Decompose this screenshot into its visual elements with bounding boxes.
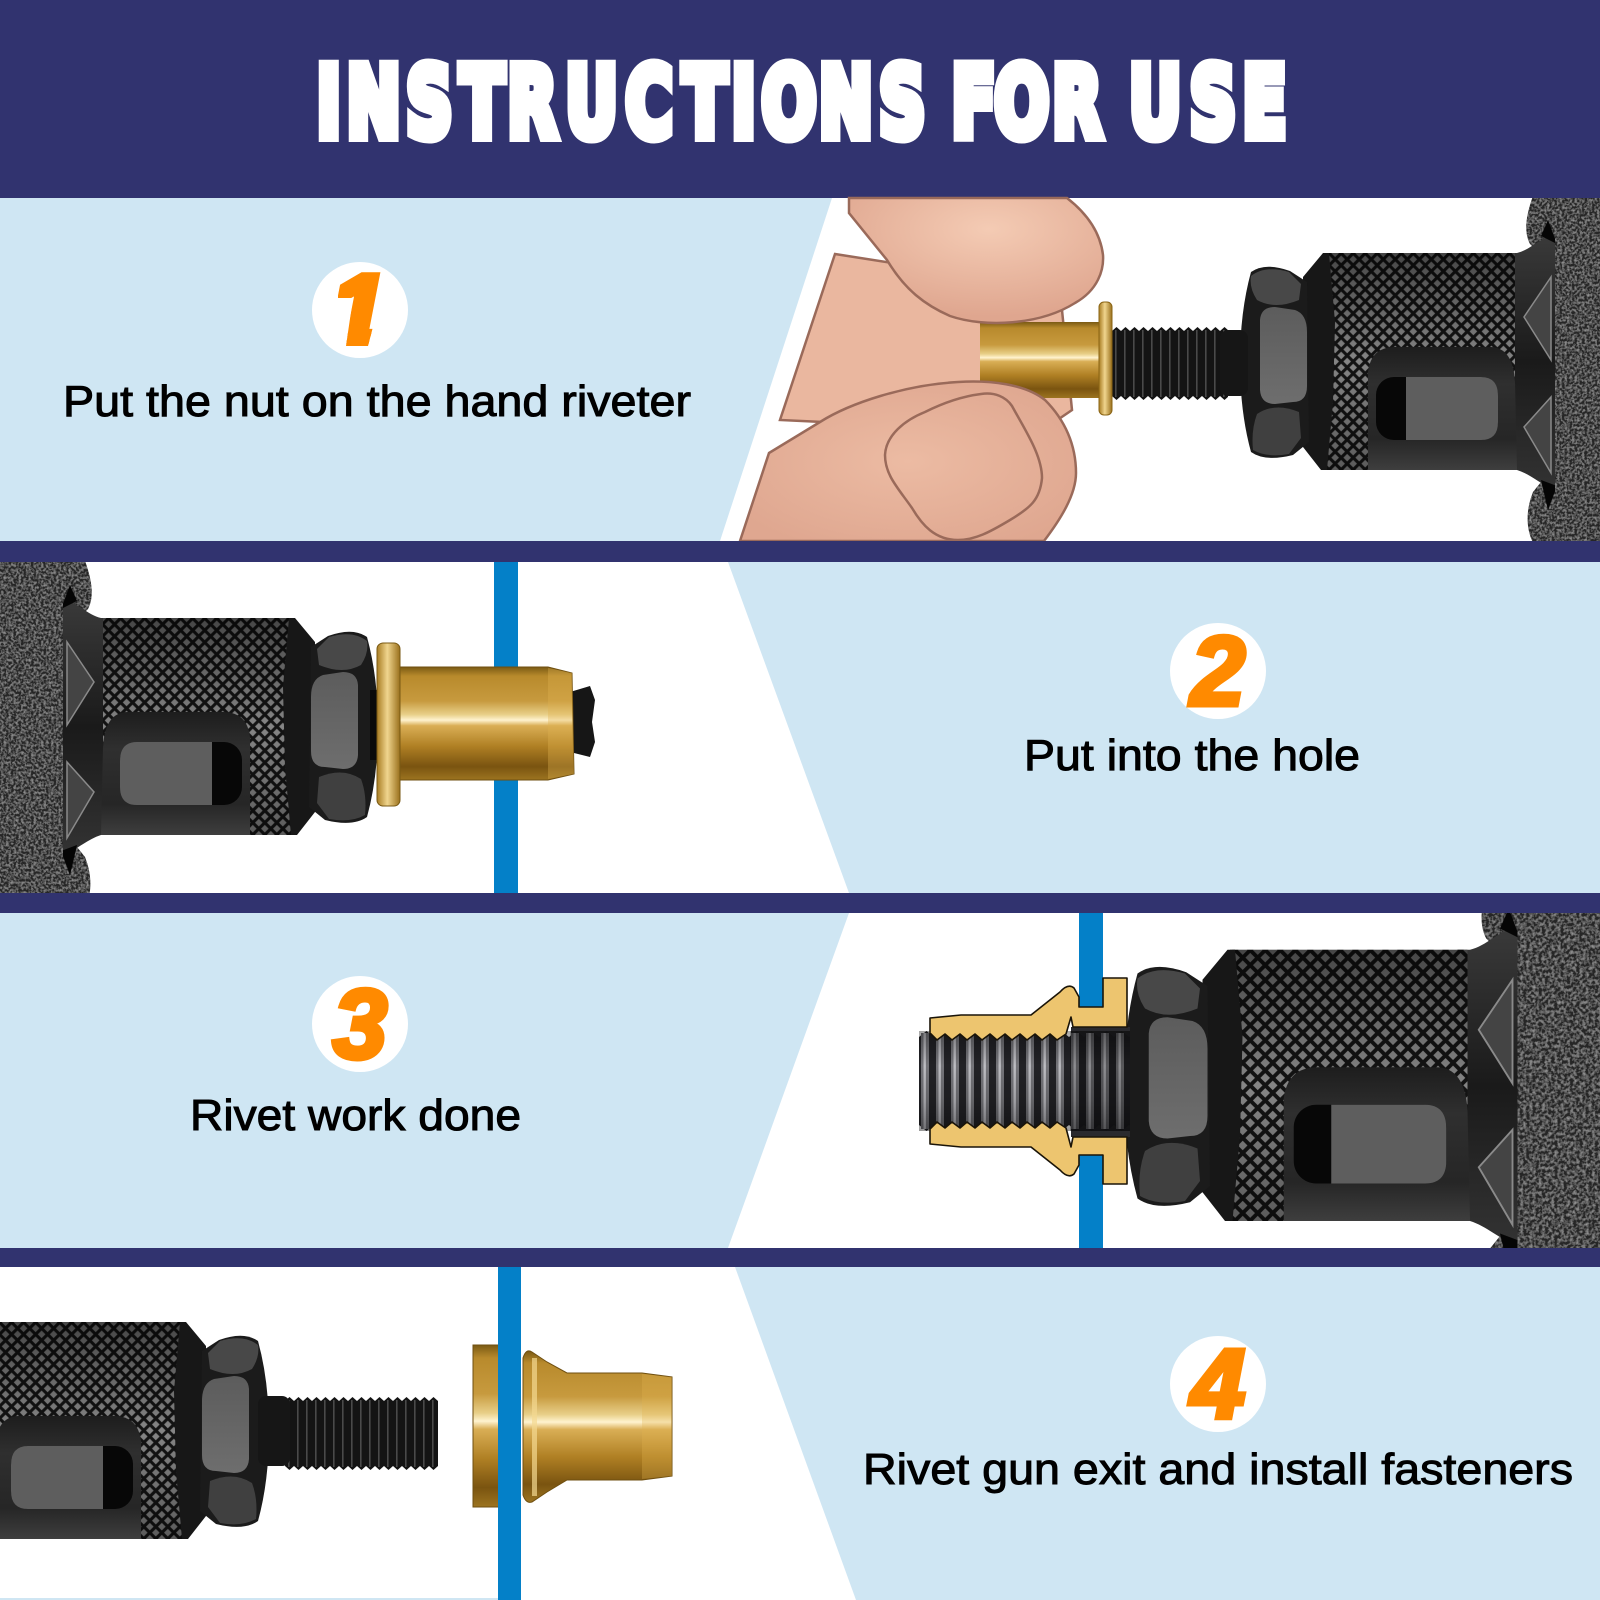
panel: step 4 (0, 1236, 1600, 1600)
step 1 text background (0, 198, 832, 541)
divider band 1 (0, 541, 1600, 562)
step 2 text background (728, 562, 1600, 893)
illustration: blue panel (1079, 913, 1103, 1248)
heading: INSTRUCTIONS FOR USE (317, 48, 1286, 160)
step 4 label: Rivet gun exit and install fasteners (863, 1445, 1573, 1494)
panel: step 1 (0, 167, 1600, 567)
step 3 label: Rivet work done (190, 1091, 521, 1140)
step 4 number badge: 4 (1189, 1329, 1245, 1439)
step 3 number badge (312, 969, 408, 1079)
step 1 number badge: 1 (331, 255, 385, 365)
illustration: bolt threads (919, 1027, 1130, 1137)
illustration: nut in hole (370, 643, 595, 806)
step 3 number badge: 3 (333, 969, 387, 1079)
step 2 label: Put into the hole (1024, 731, 1360, 780)
step 4 text background (735, 1267, 1600, 1600)
illustration: fingers holding brass nut (740, 198, 1112, 541)
illustration: nut flange left of panel (473, 1345, 499, 1507)
step 3 text background (0, 913, 849, 1248)
illustration: hand riveter with mandrel (0, 1322, 438, 1539)
panel: step 2 (0, 562, 1600, 893)
illustration: blue panel (498, 1267, 521, 1600)
divider band 2 (0, 893, 1600, 913)
step 2 number badge (1170, 616, 1266, 726)
step 2 number badge: 2 (1189, 616, 1245, 726)
step 4 number badge (1170, 1329, 1266, 1439)
illustration: blue panel (494, 562, 518, 893)
illustration: hand riveter (0, 532, 378, 932)
illustration: crimped nut right of panel (523, 1351, 672, 1502)
illustration: crimped nut cross-section (930, 978, 1127, 1184)
title banner (0, 0, 1600, 198)
illustration: hand riveter with threaded mandrel (1112, 167, 1600, 567)
illustration: hand riveter (1124, 842, 1600, 1342)
panel: step 3 (0, 913, 1600, 1248)
step 1 number badge (312, 262, 408, 358)
divider band 3 (0, 1248, 1600, 1267)
step 1 label: Put the nut on the hand riveter (63, 377, 691, 426)
